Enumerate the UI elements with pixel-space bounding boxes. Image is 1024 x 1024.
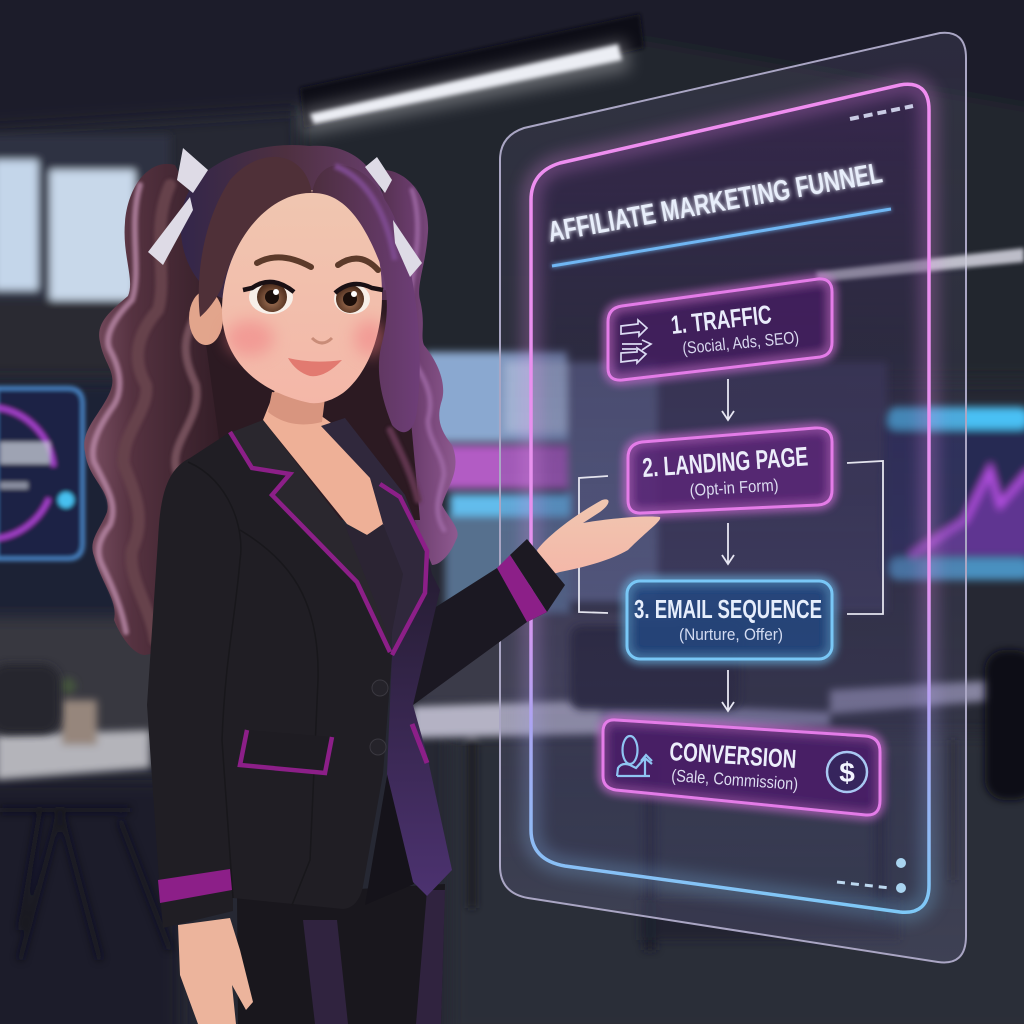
step 4: conversion — [603, 720, 880, 815]
background: left wall screen — [0, 388, 83, 559]
blazer right panel — [387, 553, 452, 896]
decorative top dashes — [850, 106, 913, 119]
pants — [237, 884, 445, 1024]
pocket flap — [240, 730, 332, 773]
front hair locks — [199, 157, 312, 317]
neck shadow — [268, 392, 325, 424]
left-side hand — [178, 918, 253, 1024]
step 2 heading: 2. LANDING PAGE — [641, 441, 809, 483]
right bracket connector — [847, 461, 883, 614]
eyebrows — [257, 257, 378, 270]
ribbon left — [148, 148, 208, 265]
left sleeve cuff band — [158, 869, 232, 903]
step 1 detail: (Social, Ads, SEO) — [682, 328, 800, 358]
glass holographic panel — [500, 33, 1024, 962]
step 3 heading: 3. EMAIL SEQUENCE — [634, 594, 822, 624]
background: ceiling light fixture — [300, 14, 644, 135]
character presenter — [84, 145, 660, 1024]
blazer buttons — [370, 680, 388, 755]
step 2 detail: (Opt-in Form) — [689, 476, 779, 500]
background: desks — [0, 678, 1000, 908]
arrow 3 — [722, 670, 734, 711]
back hair — [84, 145, 458, 655]
title underline — [552, 209, 891, 266]
mouth — [288, 358, 342, 376]
blazer lower shirt opening — [365, 770, 414, 905]
face — [222, 190, 382, 403]
left lapel — [232, 420, 390, 655]
cheeks blush — [226, 320, 386, 356]
pointing hand — [537, 499, 660, 577]
step 4 heading: CONVERSION — [669, 736, 797, 774]
right sleeve — [413, 568, 547, 705]
background: chairs — [0, 625, 1024, 960]
background: right wall screen — [884, 407, 1024, 580]
head — [189, 157, 420, 432]
inner black top — [345, 524, 403, 645]
icon: person with up arrow — [617, 736, 652, 776]
title: AFFILIATE MARKETING FUNNEL — [546, 157, 885, 249]
right lapel — [321, 418, 427, 655]
blazer left panel — [147, 432, 392, 928]
side pocket trim — [412, 724, 427, 763]
pants purple stripes — [303, 890, 445, 1024]
background: ceiling — [0, 0, 1024, 380]
hair parting shine — [335, 166, 395, 260]
right eye — [334, 284, 383, 314]
status dots — [896, 858, 906, 893]
ribbon right — [365, 157, 422, 277]
left bracket connector — [579, 476, 608, 613]
left eye — [243, 280, 294, 314]
background: lower wall and floor — [0, 380, 1024, 1024]
step 1: traffic — [608, 279, 832, 380]
blazer seams — [188, 462, 318, 905]
inner panel neon frame — [531, 84, 929, 912]
right edge highlight — [962, 130, 966, 430]
nose — [312, 338, 332, 343]
step 1 heading: 1. TRAFFIC — [669, 299, 773, 340]
step 2: landing page — [628, 428, 832, 513]
arrow 2 — [722, 523, 734, 564]
neck and chest — [263, 385, 385, 535]
arrow 1 — [722, 379, 734, 420]
icon: dollar coin — [827, 752, 867, 792]
background: far window seen behind panel — [420, 352, 887, 702]
background: window wall — [0, 135, 170, 390]
glass sheet — [500, 33, 966, 962]
decorative bottom dashes — [837, 882, 890, 888]
step 3 detail: (Nurture, Offer) — [679, 625, 783, 644]
step 3: email sequence — [627, 581, 832, 659]
right sleeve cuff — [497, 539, 565, 622]
icon: traffic arrows — [621, 320, 651, 363]
light reflection — [816, 248, 1024, 282]
icon: dollar coin: $ — [839, 757, 855, 788]
step 4 detail: (Sale, Commission) — [671, 766, 799, 794]
collar and lapel trim — [230, 432, 427, 655]
ear — [189, 291, 223, 345]
